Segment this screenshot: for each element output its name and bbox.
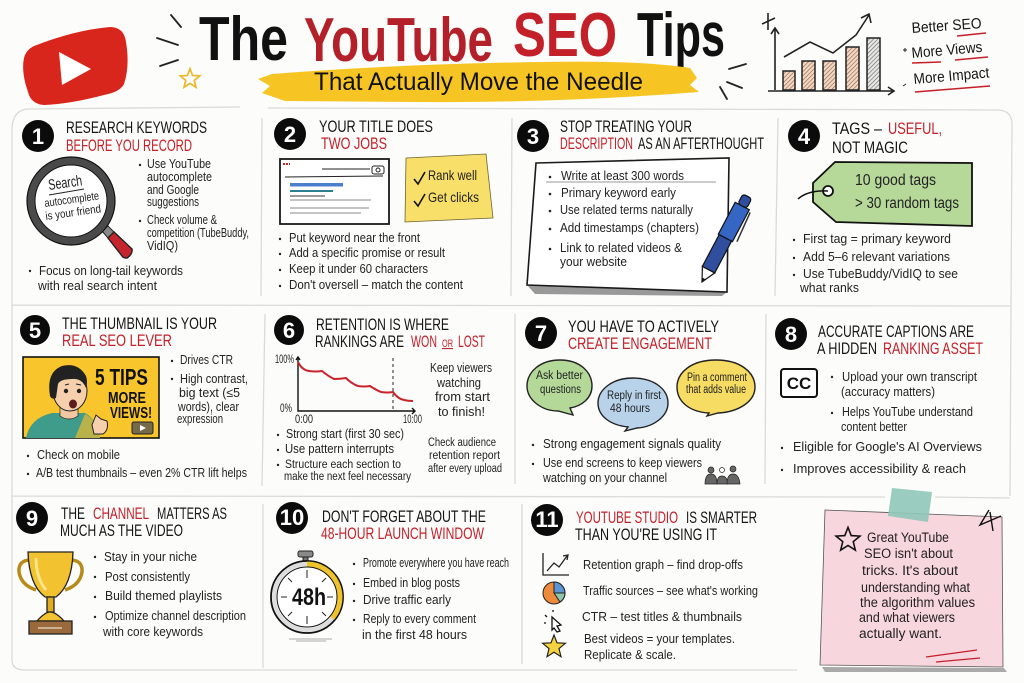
panel 11: YouTube Studio	[531, 504, 758, 662]
number 8: 8	[785, 322, 797, 347]
callout: keep viewers: Keep viewers	[430, 361, 492, 375]
retention line chart	[275, 354, 422, 426]
heading: RETENTION IS WHERE	[316, 316, 449, 334]
bullets: Check volume &	[147, 213, 218, 227]
sticky note: two jobs	[405, 154, 493, 222]
speech bubble: pin: that adds value	[686, 384, 746, 396]
panel 3: description	[517, 118, 764, 296]
bullets: Add a specific promise or result	[289, 246, 445, 260]
icon: pen	[695, 193, 758, 288]
icon: CC: CC	[787, 374, 811, 393]
heading: WON	[411, 333, 437, 351]
callout: pink sticky note	[820, 488, 1007, 672]
heading: YOUR TITLE DOES	[319, 118, 433, 136]
icon: star doodle	[836, 527, 860, 550]
bullets: A/B test thumbnails – even 2% CTR lift helps	[36, 466, 247, 480]
bullets: (accuracy matters)	[841, 385, 935, 399]
panel 2: title	[274, 118, 493, 292]
number 6	[274, 315, 304, 345]
bullets	[29, 157, 249, 293]
bullets: First tag = primary keyword	[803, 232, 951, 246]
sticky note: two jobs: Rank well	[428, 167, 477, 183]
icon: corner doodle	[980, 510, 1001, 531]
header	[23, 1, 991, 105]
heading	[560, 118, 764, 153]
heading	[62, 315, 217, 350]
thumbnail illustration	[23, 357, 159, 438]
icon: small star	[180, 69, 200, 87]
bullets: Drives CTR	[180, 353, 233, 367]
heading: IS SMARTER	[686, 509, 757, 527]
note card: your website	[560, 255, 627, 269]
bullets: expression	[177, 412, 223, 426]
heading: TAGS –	[832, 120, 883, 138]
bullets: Strong start (first 30 sec)	[286, 427, 404, 441]
tool list: CTR – test titles & thumbnails	[582, 610, 742, 624]
bullets: Post consistently	[105, 570, 191, 584]
panel 8: captions	[775, 318, 983, 476]
icon: magnifying glass: autocomplete	[44, 190, 100, 210]
heading: CREATE ENGAGEMENT	[568, 335, 712, 353]
heading: THE THUMBNAIL IS YOUR	[62, 315, 217, 333]
tape	[888, 488, 932, 522]
speech bubble: reply: Reply in first	[607, 390, 662, 402]
panel 1: research keywords	[22, 119, 249, 293]
speech bubble: reply: 48 hours	[610, 403, 650, 415]
bullets: content better	[841, 420, 907, 434]
icon: stopwatch: 48h	[292, 584, 326, 611]
bullets: High contrast,	[180, 372, 248, 386]
impact list: More Views	[911, 39, 983, 62]
bullets: Optimize channel description	[105, 609, 246, 623]
heading: USEFUL,	[888, 120, 942, 138]
retention line chart: 0:00	[295, 414, 313, 426]
panel 6: retention	[274, 315, 502, 483]
bullets: Don't oversell – match the content	[289, 278, 463, 292]
number 7: 7	[535, 321, 547, 346]
heading	[568, 318, 719, 353]
heading: CHANNEL	[93, 505, 149, 523]
bullets: big text (≤5	[179, 386, 240, 400]
number 4: 4	[798, 124, 811, 149]
number 5	[20, 315, 50, 345]
tool list: Best videos = your templates.	[584, 632, 735, 646]
bullets: Build themed playlists	[105, 589, 222, 603]
number 3	[517, 120, 549, 152]
note card	[527, 158, 729, 296]
bullets: with core keywords	[102, 625, 203, 639]
speech bubble: ask: Ask better	[536, 370, 583, 382]
thumbnail illustration: VIEWS!	[110, 405, 152, 422]
icon: stopwatch	[271, 551, 343, 641]
growth chart	[762, 13, 894, 95]
bullets: Keep it under 60 characters	[289, 262, 428, 276]
heading: DON'T FORGET ABOUT THE	[322, 508, 486, 526]
note card: Add timestamps (chapters)	[560, 221, 699, 235]
bullets	[279, 231, 463, 292]
note text: Great YouTube	[867, 530, 949, 545]
note card: Link to related videos &	[560, 241, 683, 255]
number 11	[531, 504, 563, 536]
number 7	[525, 317, 557, 349]
bullets: Add 5–6 relevant variations	[803, 250, 950, 264]
tag illustration: 10 good tags	[855, 172, 936, 189]
number 5: 5	[29, 318, 41, 343]
bullets: Use pattern interrupts	[285, 442, 394, 456]
bullets	[532, 437, 722, 485]
number 1	[22, 120, 54, 152]
number 2: 2	[284, 122, 296, 147]
title: The	[199, 5, 288, 74]
bullets	[277, 427, 411, 483]
bullets: Use YouTube	[147, 157, 211, 171]
bullets: Reply to every comment	[363, 612, 476, 626]
note card: Write at least 300 words	[561, 169, 684, 183]
heading: RANKINGS ARE	[315, 333, 404, 351]
heading: THE	[61, 505, 85, 523]
bullets: Check on mobile	[37, 448, 120, 462]
icon: cursor	[544, 610, 561, 632]
bullets: Put keyword near the front	[289, 231, 420, 245]
heading: STOP TREATING YOUR	[560, 118, 692, 136]
note text: and what viewers	[859, 610, 955, 625]
heading: RESEARCH KEYWORDS	[66, 119, 207, 137]
bullets: with real search intent	[37, 279, 158, 293]
bullets: Eligible for Google's AI Overviews	[793, 440, 982, 454]
note text	[859, 530, 975, 641]
bullets	[94, 550, 246, 639]
bullets	[781, 370, 982, 476]
callout: keep viewers: to finish!	[438, 405, 485, 419]
icon: CC	[781, 369, 817, 397]
number 10: 10	[280, 505, 304, 530]
heading	[817, 323, 983, 358]
heading	[60, 505, 227, 540]
tool list	[582, 558, 758, 662]
callout: audience report: after every upload	[428, 463, 502, 475]
tool list: Replicate & scale.	[584, 648, 676, 662]
heading	[319, 118, 433, 153]
heading	[66, 119, 207, 155]
speech bubble: reply	[598, 378, 668, 431]
tool list: Retention graph – find drop-offs	[583, 558, 743, 572]
bullets: competition (TubeBuddy,	[147, 226, 249, 240]
retention line chart: 100%	[275, 354, 294, 366]
number 1: 1	[32, 124, 44, 149]
bullets: watching on your channel	[542, 471, 667, 485]
bullets: Promote everywhere you have reach	[363, 556, 509, 570]
heading: THAN YOU'RE USING IT	[575, 526, 717, 544]
icon: people	[705, 466, 740, 484]
heading: YOU HAVE TO ACTIVELY	[568, 318, 719, 336]
bullets: Use TubeBuddy/VidIQ to see	[803, 267, 958, 281]
icon: magnifying glass: Search	[47, 172, 83, 194]
icon: graph	[543, 553, 569, 575]
panel 9: channel	[16, 502, 246, 639]
panel 4: tags	[788, 120, 972, 295]
speech bubble: ask	[527, 360, 592, 415]
note card: Primary keyword early	[561, 186, 677, 200]
number 9	[16, 502, 48, 534]
bullets: autocomplete	[147, 170, 212, 184]
bullets: Strong engagement signals quality	[543, 437, 722, 451]
title: YouTube	[304, 6, 493, 75]
panel 10: launch window	[271, 502, 509, 642]
sticky note: two jobs: Get clicks	[428, 189, 479, 205]
title: Tips	[637, 1, 725, 70]
number 3: 3	[527, 124, 539, 149]
bullets: Stay in your niche	[104, 550, 197, 564]
callout: keep viewers	[430, 361, 492, 419]
callout: keep viewers: watching	[436, 376, 481, 390]
heading: BEFORE YOU RECORD	[66, 137, 192, 155]
icon: trophy	[19, 552, 82, 634]
icon: magnifying glass	[27, 157, 132, 258]
number 6: 6	[283, 318, 295, 343]
bullets: and Google	[147, 183, 199, 197]
bullets: Focus on long-tail keywords	[39, 264, 183, 278]
bullets: Embed in blog posts	[363, 576, 460, 590]
panel 7: engagement	[525, 317, 755, 485]
heading: MATTERS AS	[157, 505, 227, 523]
note text: understanding what	[861, 580, 970, 595]
note card: Use related terms naturally	[560, 203, 694, 217]
number 4	[788, 120, 820, 152]
burst lines	[157, 15, 746, 99]
heading: REAL SEO LEVER	[62, 332, 172, 350]
speech bubble: pin: Pin a comment	[687, 372, 748, 384]
thumbnail illustration: 5 TIPS	[95, 364, 148, 390]
number 11: 11	[535, 507, 559, 532]
bullets: Upload your own transcript	[842, 370, 977, 384]
number 9: 9	[26, 506, 38, 531]
heading: NOT MAGIC	[832, 139, 908, 157]
browser illustration	[280, 159, 389, 224]
title	[199, 1, 725, 75]
heading: YOUTUBE STUDIO	[576, 509, 678, 527]
bullets: make the next feel necessary	[284, 471, 411, 483]
callout: keep viewers: from start	[435, 390, 491, 404]
callout: audience report: retention report	[429, 450, 501, 462]
icon: pie chart	[543, 582, 565, 604]
bullets: Improves accessibility & reach	[793, 462, 966, 476]
tag illustration	[798, 162, 972, 226]
bullets: in the first 48 hours	[362, 628, 467, 642]
heading: MUCH AS THE VIDEO	[60, 522, 183, 540]
bullets: Helps YouTube understand	[842, 405, 973, 419]
heading: A HIDDEN	[817, 340, 877, 358]
heading	[832, 120, 942, 157]
icon: star	[543, 635, 565, 657]
icon: magnifying glass: is your friend	[45, 203, 102, 223]
tool list: Traffic sources – see what's working	[583, 584, 758, 598]
subtitle banner: That Actually Move the Needle	[314, 68, 643, 96]
bullets: Drive traffic early	[363, 593, 452, 607]
icon: YouTube logo	[23, 27, 128, 105]
thumbnail illustration: MORE	[108, 390, 146, 407]
bullets	[353, 556, 509, 642]
note text: actually want.	[859, 626, 942, 641]
heading: OR	[442, 338, 453, 350]
note text: the algorithm values	[860, 595, 975, 610]
bullets: Structure each section to	[285, 459, 401, 471]
subtitle banner	[258, 62, 699, 102]
impact list: More Impact	[913, 64, 991, 88]
number 10	[276, 502, 308, 534]
heading: DESCRIPTION	[560, 135, 633, 153]
retention line chart: 0%	[280, 403, 292, 415]
note text: tricks. It's about	[862, 563, 958, 578]
bullets	[793, 232, 958, 295]
number 8	[775, 318, 807, 350]
heading	[315, 316, 485, 351]
impact list: Better SEO	[911, 15, 982, 37]
heading	[321, 508, 486, 543]
heading: RANKING ASSET	[883, 340, 983, 358]
speech bubble: ask: questions	[540, 384, 581, 396]
bullets: Use end screens to keep viewers	[543, 456, 702, 470]
panel 5: thumbnail	[20, 315, 248, 480]
heading: LOST	[458, 333, 485, 351]
heading: 48-HOUR LAUNCH WINDOW	[321, 525, 484, 543]
heading: TWO JOBS	[321, 135, 387, 153]
tag illustration: > 30 random tags	[855, 195, 959, 212]
bullets	[27, 353, 248, 480]
retention line chart: 10:00	[403, 414, 422, 426]
number 2	[274, 118, 306, 150]
bullets: VidIQ)	[147, 239, 178, 253]
callout: audience report: Check audience	[428, 437, 496, 449]
bullets: what ranks	[799, 281, 859, 295]
callout: audience report	[428, 437, 502, 475]
impact list	[903, 15, 991, 92]
note text: SEO isn't about	[864, 546, 953, 561]
title: SEO	[513, 1, 617, 70]
heading	[575, 509, 757, 544]
bullets: suggestions	[147, 195, 199, 209]
speech bubble: pin	[677, 360, 755, 416]
heading: AS AN AFTERTHOUGHT	[638, 135, 764, 153]
bullets: words), clear	[177, 400, 239, 414]
